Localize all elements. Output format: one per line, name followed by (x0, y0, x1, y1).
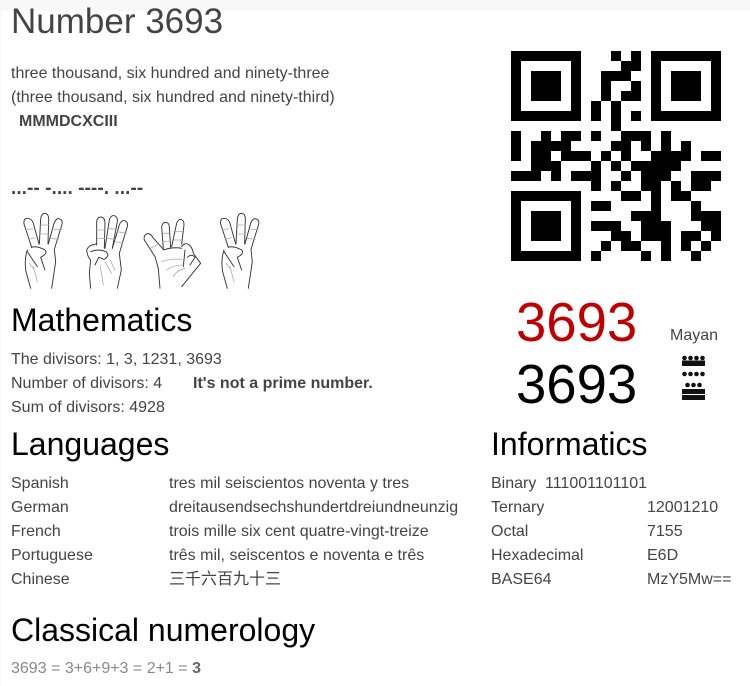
icon: hand sign 3 (24, 213, 62, 288)
numerology calculation: 3693 = 3+6+9+3 = 2+1 = 3 (11, 660, 201, 677)
divisors facts: It's not a prime number. (193, 375, 373, 392)
informatics table: Ternary (491, 499, 544, 516)
languages table (11, 475, 458, 588)
roman numeral: MMMDCXCIII (19, 113, 118, 130)
Mayan label: Mayan (670, 327, 718, 344)
languages table: Spanish (11, 475, 69, 492)
informatics table: 12001210 (647, 499, 718, 516)
icon: sign language hands (24, 213, 259, 288)
number in black: 3693 (516, 354, 637, 415)
number names in words (11, 65, 335, 106)
icon: hand sign 6 (87, 216, 128, 288)
divisors facts: Number of divisors: 4 (11, 375, 162, 392)
informatics table: Hexadecimal (491, 547, 583, 564)
heading: Informatics: Informatics (491, 426, 647, 462)
languages table: dreitausendsechshundertdreiundneunzig (169, 499, 458, 516)
number names in words: (three thousand, six hundred and ninety-third) (11, 89, 335, 106)
icon: Mayan numeral (682, 356, 705, 400)
QR code (511, 51, 721, 261)
languages table: Portuguese (11, 547, 93, 564)
title: Number 3693 (11, 2, 223, 41)
informatics table: Binary (491, 475, 536, 492)
languages table: Chinese (11, 571, 70, 588)
informatics table: Octal (491, 523, 528, 540)
icon: hand sign 3 (221, 213, 259, 288)
languages table: French (11, 523, 61, 540)
heading: Mathematics: Mathematics (11, 302, 192, 338)
informatics table: BASE64 (491, 571, 552, 588)
number names in words: three thousand, six hundred and ninety-three (11, 65, 330, 82)
icon: hand sign 9 (144, 219, 201, 288)
informatics table: MzY5Mw== (647, 571, 731, 588)
morse code: ...-- -.... ----. ...-- (11, 178, 143, 199)
divisors facts: Sum of divisors: 4928 (11, 399, 165, 416)
languages table: 三千六百九十三 (169, 570, 281, 588)
divisors facts: The divisors: 1, 3, 1231, 3693 (11, 351, 222, 368)
languages table: tres mil seiscientos noventa y tres (169, 475, 409, 492)
heading: Classical numerology: Classical numerology (11, 612, 315, 648)
informatics table: E6D (647, 547, 678, 564)
number in red: 3693 (516, 292, 637, 353)
informatics table (491, 475, 731, 588)
informatics table: 7155 (647, 523, 683, 540)
heading: Languages: Languages (11, 426, 169, 462)
informatics table: 111001101101 (545, 475, 647, 492)
languages table: três mil, seiscentos e noventa e três (169, 547, 424, 564)
languages table: trois mille six cent quatre-vingt-treize (169, 523, 429, 540)
languages table: German (11, 499, 69, 516)
divisors facts (11, 351, 373, 416)
